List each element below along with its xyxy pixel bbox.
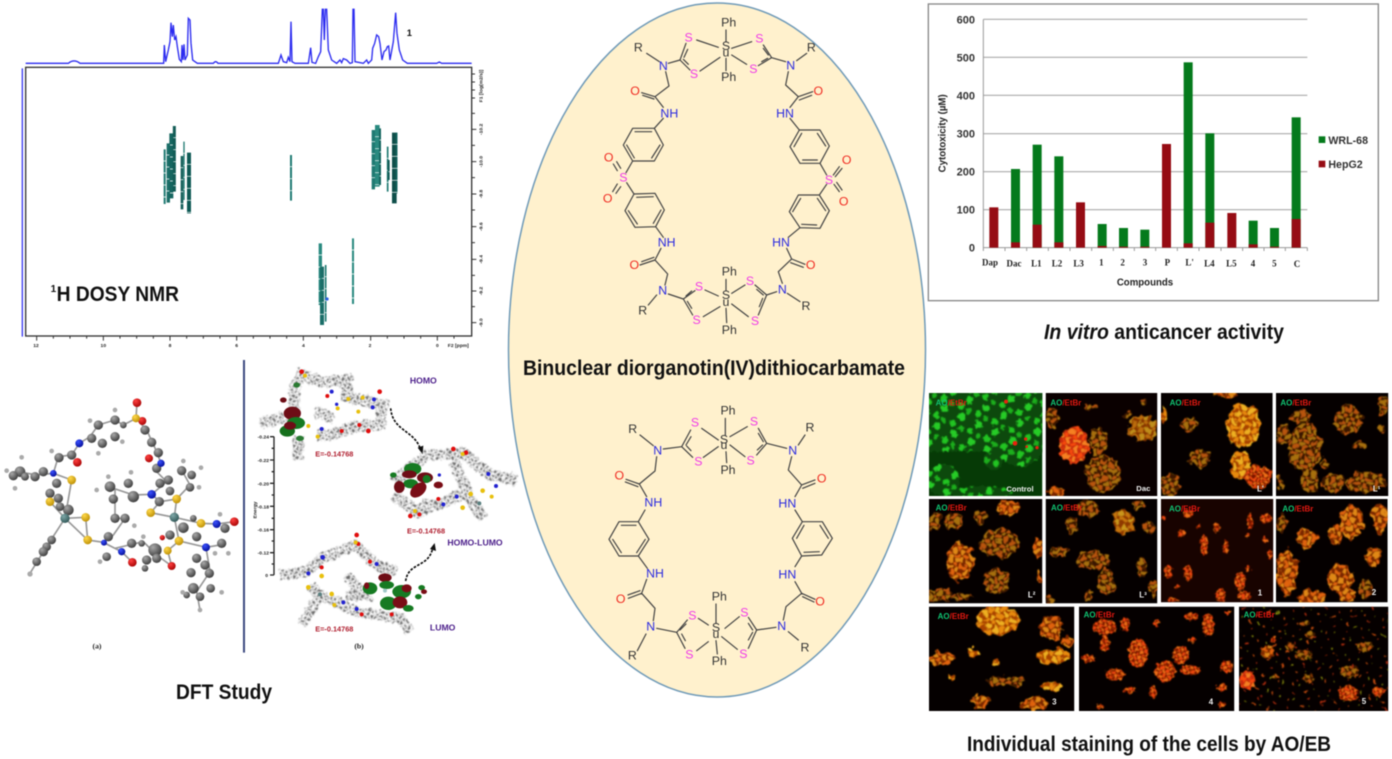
atom labels: S: [740, 606, 748, 620]
atom labels: N: [778, 282, 787, 296]
axis ticks: [37, 74, 476, 341]
atom labels: S: [688, 608, 696, 622]
x axis labels: F2 [ppm]: [448, 343, 469, 349]
atom labels: O: [814, 84, 823, 98]
atom labels: O: [806, 258, 815, 272]
atom labels: S: [722, 288, 730, 302]
x axis title: Compounds: [1117, 278, 1173, 289]
atom labels: R: [628, 422, 637, 436]
y axis labels: -10.0: [479, 156, 485, 167]
y axis tick labels: 300: [957, 129, 975, 141]
micrograph: compound 1: 1: [1258, 589, 1263, 598]
atom labels: O: [630, 258, 639, 272]
panel: AO/EB cell staining grid: [922, 385, 1388, 711]
y axis tick labels: [957, 14, 975, 255]
atom labels: [615, 404, 826, 668]
atom labels: n: [712, 628, 719, 642]
y axis tick labels: 400: [957, 90, 975, 102]
x axis labels: 6: [235, 343, 238, 349]
axes: [983, 19, 1307, 251]
atom labels: NH: [660, 106, 678, 120]
micrograph: L2: [928, 498, 1044, 604]
x axis tick labels: [982, 258, 1300, 269]
micrograph: Dac: [1044, 392, 1158, 497]
heading: compound class: Binuclear diorganotin(IV)dithiocarbamate: [523, 357, 905, 380]
micrograph: L3: L³: [1139, 590, 1147, 599]
micrograph: L': [1160, 392, 1274, 497]
atom labels: S: [685, 648, 693, 662]
atom labels: Ph: [722, 265, 737, 279]
micrograph: compound 5: 5: [1362, 697, 1367, 706]
x axis tick labels: L': [1185, 258, 1194, 268]
gap energy: E=-0.14768: [407, 526, 445, 535]
atom labels: S: [720, 432, 728, 446]
micrograph: L1: [1275, 392, 1390, 497]
x axis tick labels: 5: [1272, 258, 1277, 268]
y axis labels: -9.2: [479, 286, 485, 295]
energy axis: -0.12: [258, 551, 269, 557]
micrograph: compound 3: AO/EtBr: [938, 612, 969, 621]
micrograph: compound 3: 3: [1052, 697, 1057, 706]
gap orbital structure: [390, 447, 517, 518]
DOSY contours: [165, 125, 397, 325]
atom labels: n: [722, 296, 729, 310]
micrograph: compound 5: [1238, 606, 1390, 712]
atom labels: R: [802, 299, 811, 313]
micrograph: compound 5: AO/EtBr: [1244, 611, 1275, 620]
x axis tick labels: Dap: [982, 258, 998, 268]
atom labels: [603, 16, 851, 337]
HOMO label: HOMO: [410, 376, 437, 386]
micrograph: L2: AO/EtBr: [936, 504, 967, 513]
micrograph: Control: AO/EtBr: [936, 399, 967, 408]
atom labels: O: [817, 471, 826, 485]
atom labels: NH: [644, 496, 662, 510]
atom labels: S: [747, 454, 755, 468]
atom labels: S: [755, 31, 763, 45]
x axis labels: [33, 343, 469, 349]
heading: in vitro activity: In vitro anticancer activity: [1044, 321, 1284, 344]
atom labels: N: [646, 620, 655, 634]
y axis labels: -9.0: [479, 318, 485, 327]
bonds: [609, 418, 832, 654]
y axis tick labels: 0: [969, 243, 975, 255]
atom labels: NH: [658, 236, 676, 250]
energy axis: -0.20: [258, 481, 269, 487]
energy axis: -0.18: [258, 504, 269, 510]
NMR label: 1: [51, 284, 57, 295]
heading: DFT Study: DFT Study: [176, 681, 272, 704]
atom labels: n: [720, 440, 727, 454]
compound number: 1: [407, 28, 412, 38]
micrograph: compound 1: AO/EtBr: [1169, 504, 1200, 513]
micrograph: compound 4: AO/EtBr: [1084, 611, 1115, 620]
x axis labels: 0: [436, 343, 439, 349]
micrograph: compound 3: [928, 606, 1076, 712]
y axis tick labels: 500: [957, 52, 975, 64]
atom labels: Ph: [712, 590, 727, 604]
atom labels: Ph: [712, 654, 727, 668]
x axis tick labels: L4: [1204, 258, 1215, 268]
atom labels: S: [693, 313, 701, 327]
LUMO label: LUMO: [430, 622, 456, 632]
x axis tick labels: 1: [1099, 258, 1104, 268]
energy axis: 0: [265, 573, 268, 579]
y axis labels: F1 [log(m2/s)]: [479, 69, 485, 102]
micrograph: L': AO/EtBr: [1170, 399, 1201, 408]
atom labels: NH: [646, 566, 664, 580]
micrograph: Control: [928, 392, 1044, 497]
atom labels: N: [777, 619, 786, 633]
atom labels: HN: [778, 567, 796, 581]
atom labels: HN: [776, 106, 794, 120]
1D proton trace on top: [26, 9, 472, 63]
atom labels: N: [658, 284, 667, 298]
y axis title: Cytotoxicity (µM): [938, 94, 949, 172]
atom labels: Ph: [720, 463, 736, 477]
y axis tick labels: 600: [957, 14, 975, 26]
y axis labels: -9.8: [479, 189, 485, 198]
panel: DFT study: [4, 360, 517, 653]
bonds: [623, 30, 829, 323]
plot frame: [26, 67, 472, 336]
x axis tick labels: 2: [1120, 258, 1125, 268]
panel: cytotoxicity bar chart: [928, 4, 1378, 301]
x axis labels: 10: [101, 343, 106, 349]
micrograph: L3: AO/EtBr: [1051, 504, 1082, 513]
atom labels: S: [685, 30, 693, 44]
micrograph: compound 2: 2: [1372, 588, 1377, 597]
atom labels: S: [619, 170, 627, 184]
LUMO orbital structure: [280, 533, 427, 632]
atom labels: S: [712, 620, 720, 634]
atom labels: S: [746, 274, 754, 288]
atom labels: S: [691, 415, 699, 429]
energy axis: -0.22: [258, 458, 269, 464]
micrograph: compound 1: [1160, 498, 1274, 604]
energy axis: Energy: [253, 501, 259, 518]
atom labels: R: [806, 421, 815, 435]
atom labels: S: [695, 280, 703, 294]
atom labels: S: [749, 62, 757, 76]
atom labels: S: [694, 455, 702, 469]
HOMO energy: E=-0.14768: [315, 450, 353, 459]
caption (a): (a): [93, 642, 102, 651]
micrograph: L2: L²: [1028, 591, 1036, 600]
x axis labels: 12: [33, 343, 39, 349]
WRL-68 bars: [1011, 62, 1301, 248]
x axis labels: 2: [369, 343, 372, 349]
micrograph: compound 4: [1078, 606, 1236, 712]
micrograph: Control: Control: [1006, 485, 1034, 494]
arrow: HOMO to gap: [391, 408, 423, 454]
structure: upper macrocycle: [603, 16, 851, 337]
atom labels: S: [825, 173, 833, 187]
x axis labels: 8: [169, 343, 172, 349]
HepG2 bars: [989, 144, 1301, 248]
x axis tick labels: 4: [1251, 258, 1256, 268]
atom labels: HN: [772, 236, 790, 250]
HOMO-LUMO label: HOMO-LUMO: [447, 538, 503, 548]
atom labels: S: [750, 415, 758, 429]
atom labels: O: [616, 592, 625, 606]
y axis tick labels: 100: [957, 205, 975, 217]
NMR label: H DOSY NMR: [57, 283, 179, 306]
atom labels: Ph: [721, 70, 736, 84]
atom labels: O: [842, 153, 851, 167]
atom labels: O: [630, 84, 640, 98]
energy axis: [253, 435, 274, 579]
divider: [241, 360, 247, 653]
x axis tick labels: L3: [1073, 258, 1084, 268]
caption (b): (b): [354, 642, 364, 651]
micrograph: L1: AO/EtBr: [1280, 399, 1311, 408]
atom labels: R: [638, 304, 647, 318]
x axis tick labels: P: [1165, 258, 1171, 268]
grid lines: [983, 19, 1307, 210]
atom labels: HN: [778, 496, 796, 510]
atom labels: O: [603, 191, 612, 205]
y axis labels: [479, 69, 485, 327]
atom labels: S: [722, 39, 730, 53]
y axis labels: -9.6: [479, 222, 485, 231]
micrograph: Dac: AO/EtBr: [1050, 399, 1081, 408]
panel: yellow egg background: [508, 3, 926, 697]
y axis labels: -9.4: [479, 255, 485, 264]
atom labels: R: [801, 640, 810, 654]
atom labels: O: [815, 595, 825, 609]
y axis labels: -10.2: [479, 123, 485, 135]
x axis tick labels: Dac: [1007, 258, 1021, 268]
micrograph: L1: L¹: [1373, 485, 1381, 494]
optimized geometry (a): [4, 398, 239, 612]
x axis tick labels: L1: [1031, 258, 1042, 268]
atom labels: Ph: [721, 16, 736, 30]
atom labels: O: [839, 195, 848, 209]
heading: staining caption: Individual staining of the cells by AO/EB: [967, 733, 1331, 756]
atom labels: Ph: [720, 404, 736, 418]
bonds: [18, 403, 234, 610]
LUMO energy: E=-0.14768: [315, 624, 353, 633]
micrograph: compound 2: AO/EtBr: [1282, 505, 1313, 514]
atom labels: S: [739, 647, 747, 661]
atom labels: R: [807, 41, 816, 55]
HOMO orbital structure: [260, 369, 383, 460]
atom labels: n: [722, 47, 729, 61]
y axis tick labels: 200: [957, 167, 975, 179]
panel: 1H DOSY NMR spectrum: [22, 9, 485, 349]
micrograph: Dac: Dac: [1136, 484, 1151, 493]
micrograph: compound 4: 4: [1209, 697, 1214, 706]
atom labels: Ph: [722, 323, 737, 337]
left axis projection: [20, 68, 24, 337]
atom labels: O: [615, 469, 624, 483]
structure: lower macrocycle: [609, 404, 832, 668]
atom labels: R: [634, 41, 643, 55]
legend: [1319, 135, 1368, 171]
atom labels: N: [788, 444, 797, 458]
legend: WRL-68: [1328, 135, 1368, 147]
x axis tick labels: L2: [1052, 258, 1063, 268]
atom labels: N: [659, 59, 668, 73]
x axis tick labels: L5: [1226, 258, 1237, 268]
atom labels: S: [751, 314, 759, 328]
atom labels: N: [786, 59, 795, 73]
chart frame: [928, 4, 1378, 301]
arrow: gap to HOMO-LUMO: [406, 543, 436, 581]
atom labels: R: [628, 649, 637, 663]
atom labels: O: [604, 150, 613, 164]
micrograph: L': L': [1257, 485, 1264, 494]
micrograph: L3: [1044, 498, 1158, 604]
atom labels: N: [653, 444, 662, 458]
micrograph: compound 2: [1275, 498, 1388, 604]
x axis labels: 4: [302, 343, 305, 349]
energy axis: -0.16: [258, 528, 269, 534]
energy axis: -0.24: [258, 435, 269, 441]
atom labels: S: [690, 67, 698, 81]
x axis tick labels: C: [1294, 259, 1300, 269]
legend: HepG2: [1328, 159, 1363, 171]
x axis tick labels: 3: [1143, 258, 1148, 268]
